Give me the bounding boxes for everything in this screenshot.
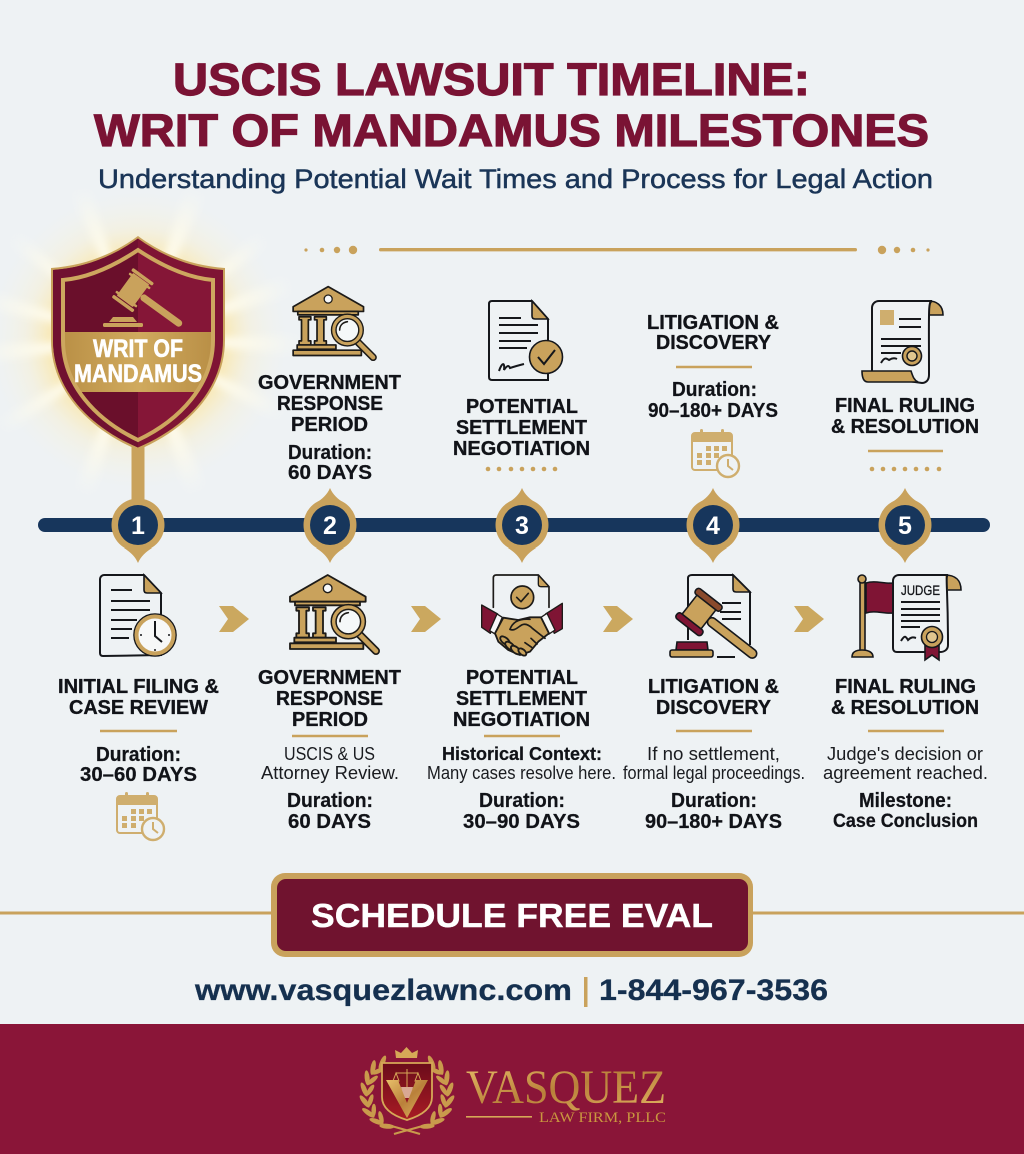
heading: DISCOVERY bbox=[656, 332, 772, 354]
duration: 30–90 DAYS bbox=[463, 811, 580, 833]
duration bbox=[645, 790, 782, 833]
shield: writ of mandamus bbox=[51, 236, 225, 450]
heading: FINAL RULING bbox=[835, 676, 976, 698]
duration: Duration: bbox=[479, 790, 565, 812]
duration bbox=[463, 790, 580, 833]
description: formal legal proceedings. bbox=[623, 762, 805, 783]
heading: RESPONSE bbox=[276, 688, 383, 710]
heading: POTENTIAL bbox=[466, 667, 578, 689]
title: USCIS LAWSUIT TIMELINE: bbox=[173, 54, 810, 105]
title: WRIT OF MANDAMUS MILESTONES bbox=[94, 105, 929, 156]
lower column 4: litigation bbox=[623, 575, 805, 833]
node 5 bbox=[878, 488, 932, 563]
duration: 60 DAYS bbox=[288, 811, 371, 833]
icon: flag and judge decree bbox=[852, 575, 961, 660]
arrow 3 bbox=[603, 606, 633, 632]
icon: flag and judge decree: JUDGE bbox=[901, 582, 940, 598]
heading: RESPONSE bbox=[277, 393, 383, 415]
duration: Duration: bbox=[96, 744, 181, 766]
heading bbox=[258, 667, 401, 731]
lower column 1: initial filing bbox=[58, 575, 219, 840]
heading: NEGOTIATION bbox=[453, 709, 590, 731]
description: If no settlement, bbox=[647, 743, 780, 764]
icon: handshake with document bbox=[482, 575, 562, 657]
description: USCIS & US bbox=[284, 743, 375, 764]
icon: courthouse with magnifier bbox=[290, 575, 376, 651]
milestone: Milestone: bbox=[859, 790, 952, 812]
heading: LITIGATION & bbox=[647, 312, 779, 334]
duration: Duration: bbox=[672, 379, 757, 401]
heading: PERIOD bbox=[292, 709, 368, 731]
description bbox=[261, 743, 399, 783]
node 4 bbox=[686, 488, 740, 563]
duration: 90–180+ DAYS bbox=[645, 811, 782, 833]
node 2 bbox=[304, 488, 356, 563]
heading bbox=[831, 395, 979, 438]
heading: GOVERNMENT bbox=[258, 372, 401, 394]
duration: Duration: bbox=[671, 790, 757, 812]
logo: wordmark: LAW FIRM, PLLC bbox=[539, 1110, 666, 1126]
heading bbox=[648, 676, 779, 719]
upper column 4: litigation bbox=[647, 312, 779, 477]
description: Attorney Review. bbox=[261, 762, 399, 783]
duration bbox=[288, 442, 372, 484]
decorative dotted rule bbox=[304, 246, 930, 254]
description: Historical Context: bbox=[442, 743, 602, 764]
icon: gavel with document bbox=[670, 575, 767, 671]
lower column 5: final ruling bbox=[823, 575, 988, 832]
shield label bbox=[74, 335, 202, 388]
heading bbox=[258, 372, 401, 436]
heading: LITIGATION & bbox=[648, 676, 779, 698]
button: schedule free eval: SCHEDULE FREE EVAL bbox=[311, 897, 713, 934]
dotted divider bbox=[486, 467, 557, 471]
heading: PERIOD bbox=[291, 414, 368, 436]
heading: SETTLEMENT bbox=[456, 417, 587, 439]
heading: CASE REVIEW bbox=[69, 697, 208, 719]
shield glow bbox=[0, 190, 305, 505]
description: Judge's decision or bbox=[827, 743, 983, 764]
milestone bbox=[833, 790, 978, 832]
node 1: 1 bbox=[131, 512, 145, 540]
node 2: 2 bbox=[323, 512, 337, 540]
icon: gavel bbox=[103, 268, 192, 340]
heading bbox=[647, 312, 779, 354]
heading: SETTLEMENT bbox=[456, 688, 587, 710]
lower column 3: settlement bbox=[427, 575, 616, 833]
arrow 2 bbox=[411, 606, 441, 632]
icon: calendar with clock bbox=[692, 429, 739, 477]
icon: document with clock bbox=[100, 575, 176, 656]
heading bbox=[453, 396, 590, 460]
shield label: MANDAMUS bbox=[74, 360, 202, 388]
footer band bbox=[0, 1024, 1024, 1154]
description: Many cases resolve here. bbox=[427, 762, 616, 783]
upper column 5: final ruling bbox=[831, 301, 979, 471]
upper column 2: government response bbox=[258, 287, 401, 484]
button: schedule free eval bbox=[271, 873, 753, 957]
arrow 4 bbox=[794, 606, 824, 632]
milestone: Case Conclusion bbox=[833, 811, 978, 832]
title bbox=[94, 54, 929, 156]
contact line: www.vasquezlawnc.com bbox=[194, 974, 572, 1007]
heading: INITIAL FILING & bbox=[58, 676, 219, 698]
heading: DISCOVERY bbox=[656, 697, 772, 719]
heading: NEGOTIATION bbox=[453, 438, 590, 460]
heading bbox=[453, 667, 590, 731]
description bbox=[427, 743, 616, 783]
heading: GOVERNMENT bbox=[258, 667, 401, 689]
node 3 bbox=[496, 488, 548, 563]
lower column 2: government response bbox=[258, 575, 401, 833]
icon: document with check bbox=[489, 301, 562, 380]
node 3: 3 bbox=[515, 512, 529, 540]
timeline bar bbox=[38, 518, 990, 532]
heading: & RESOLUTION bbox=[831, 416, 979, 438]
heading: & RESOLUTION bbox=[831, 697, 979, 719]
duration: 60 DAYS bbox=[288, 462, 372, 484]
logo: wordmark: VASQUEZ bbox=[466, 1061, 666, 1114]
logo: wreath emblem bbox=[358, 1047, 456, 1135]
rule either side of button bbox=[0, 912, 1024, 914]
heading: POTENTIAL bbox=[466, 396, 578, 418]
shield label: WRIT OF bbox=[93, 335, 183, 363]
subtitle: Understanding Potential Wait Times and Process for Legal Action bbox=[98, 164, 933, 194]
duration bbox=[80, 744, 197, 786]
heading bbox=[58, 676, 219, 719]
stem from shield to node 1 bbox=[132, 445, 144, 505]
duration: Duration: bbox=[287, 790, 373, 812]
icon: calendar with clock bbox=[117, 792, 164, 840]
heading bbox=[831, 676, 979, 719]
upper column 3: settlement bbox=[453, 301, 590, 471]
node 4: 4 bbox=[706, 512, 720, 540]
contact line bbox=[194, 974, 828, 1007]
dotted divider bbox=[870, 467, 941, 471]
duration: 30–60 DAYS bbox=[80, 764, 197, 786]
contact line: 1-844-967-3536 bbox=[599, 974, 828, 1007]
node 5: 5 bbox=[898, 512, 912, 540]
duration: 90–180+ DAYS bbox=[648, 400, 778, 422]
description bbox=[623, 743, 805, 783]
heading: FINAL RULING bbox=[835, 395, 975, 417]
description: agreement reached. bbox=[823, 762, 988, 783]
arrow 1 bbox=[219, 606, 249, 632]
duration bbox=[648, 379, 778, 422]
node 1 bbox=[112, 498, 164, 563]
description bbox=[823, 743, 988, 783]
icon: courthouse with magnifier (upper) bbox=[293, 287, 373, 357]
icon: scroll with seal bbox=[862, 301, 943, 383]
duration: Duration: bbox=[288, 442, 372, 464]
duration bbox=[287, 790, 373, 833]
